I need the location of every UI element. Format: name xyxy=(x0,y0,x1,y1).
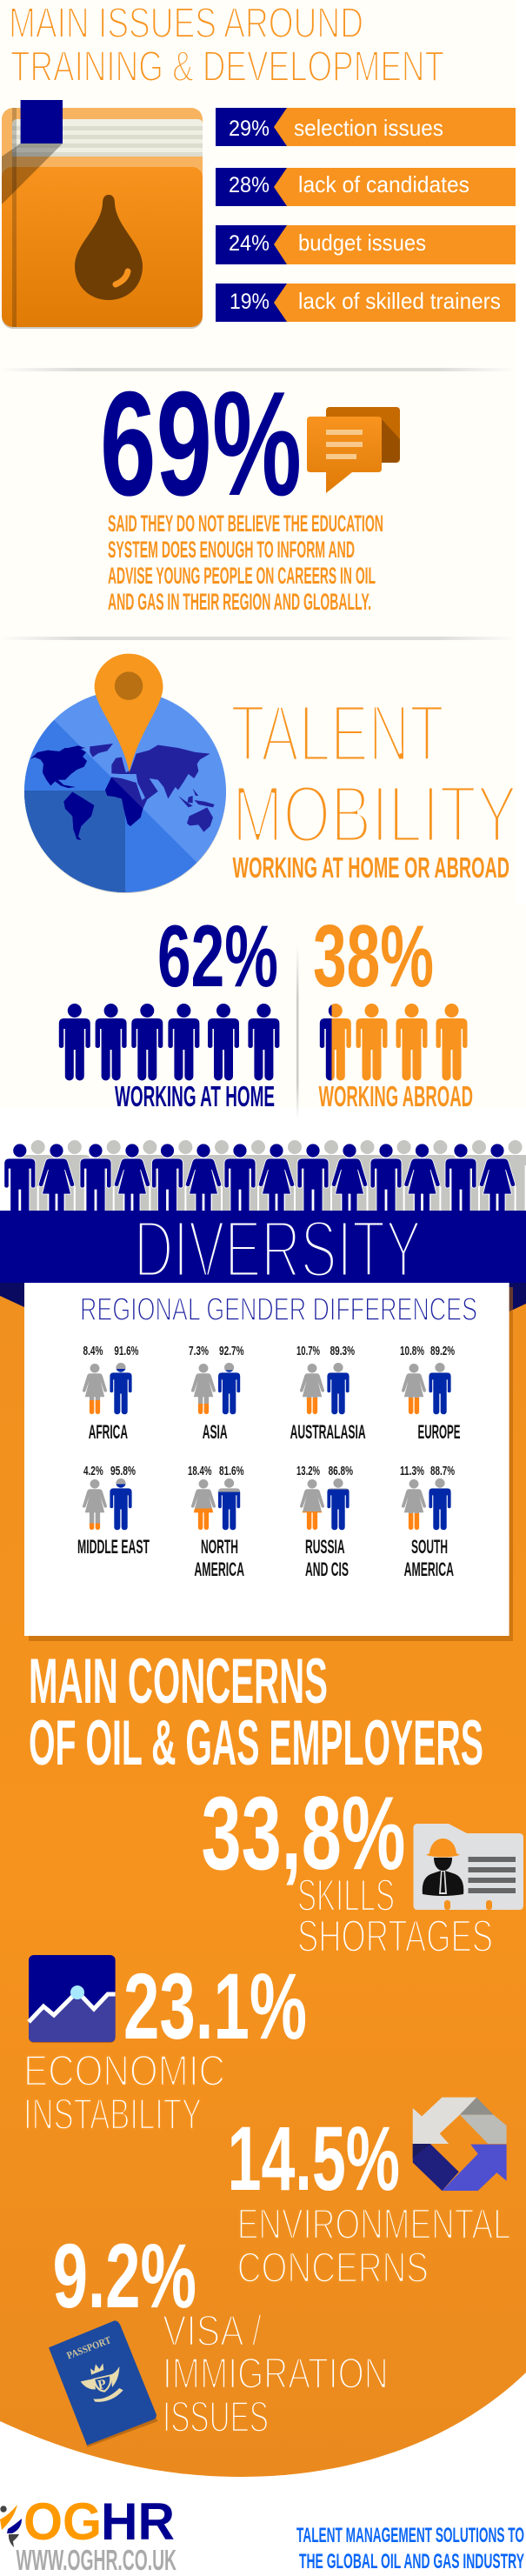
stat: 62% working at home xyxy=(59,908,279,1113)
bar: lack of skilled trainers xyxy=(216,284,516,322)
concern: environmental concerns: 14.5% xyxy=(228,2108,400,2210)
divider xyxy=(296,945,299,1119)
concern: visa and immigration issues: IMMIGRATION xyxy=(163,2349,389,2398)
region: Middle East xyxy=(77,1465,150,1558)
logo: OGHR xyxy=(0,2493,176,2576)
panel: regional gender differences xyxy=(24,1283,513,1641)
region: Russia and CIS: 13.2% xyxy=(296,1465,320,1478)
text: education statement xyxy=(108,511,383,615)
bar: budget issues xyxy=(216,225,516,264)
logo: OGHR: WWW.OGHR.CO.UK xyxy=(16,2544,176,2576)
bar: selection issues: selection issues xyxy=(294,115,443,141)
region: South America: SOUTH xyxy=(411,1536,448,1558)
concern: economic instability: INSTABILITY xyxy=(23,2090,202,2139)
footer xyxy=(0,2493,524,2576)
region: South America: AMERICA xyxy=(404,1558,454,1580)
bar: lack of candidates xyxy=(216,168,516,206)
concern: environmental concerns xyxy=(228,2098,511,2292)
concern: economic instability: 23.1% xyxy=(123,1953,307,2059)
page background xyxy=(0,0,526,1107)
bar: budget issues: budget issues xyxy=(298,230,426,256)
region: Africa xyxy=(83,1345,138,1443)
region: Australasia: AUSTRALASIA xyxy=(290,1421,366,1443)
crowd of blue figures xyxy=(4,1144,516,1221)
stat: 62% working at home: 62% xyxy=(157,908,278,1005)
region: Middle East: 95.8% xyxy=(110,1465,136,1478)
icon: recycling arrows xyxy=(413,2098,507,2191)
big number: 69%: 69% xyxy=(100,361,302,527)
region: Russia and CIS: 86.8% xyxy=(329,1465,353,1478)
heading: talent mobility xyxy=(230,688,517,859)
region: Asia: 92.7% xyxy=(219,1345,244,1358)
panel: talent mobility xyxy=(0,654,517,1119)
bar: lack of candidates: 28% xyxy=(229,173,270,197)
region: South America: 11.3% xyxy=(400,1465,424,1478)
icon: globe with map pin xyxy=(24,654,226,893)
bar: lack of skilled trainers: 19% xyxy=(230,290,270,314)
tagline xyxy=(296,2524,524,2573)
region: North America: 81.6% xyxy=(219,1465,244,1478)
logo: OGHR: HR xyxy=(101,2493,175,2551)
region: Africa: AFRICA xyxy=(89,1421,128,1443)
bar: lack of candidates: lack of candidates xyxy=(298,171,469,197)
heading: main concerns xyxy=(29,1646,483,1779)
stat: 38% working abroad xyxy=(313,908,473,1113)
logo: OGHR: OG xyxy=(23,2493,102,2551)
region: Asia: ASIA xyxy=(203,1421,228,1443)
heading: talent mobility: TALENT xyxy=(230,688,444,778)
region: Middle East: MIDDLE EAST xyxy=(77,1536,150,1558)
bar: selection issues: 29% xyxy=(229,117,270,141)
region: North America: 18.4% xyxy=(188,1465,212,1478)
region: Africa: 91.6% xyxy=(114,1345,138,1358)
region: Europe: 10.8% xyxy=(400,1345,424,1358)
panel: main concerns xyxy=(23,1646,523,2447)
panel: training issues xyxy=(2,0,516,329)
concern: visa and immigration issues: VISA / xyxy=(163,2306,262,2355)
panel: 69 percent statistic xyxy=(0,361,516,640)
heading: main issues xyxy=(9,0,444,90)
region: Middle East: 4.2% xyxy=(83,1465,103,1478)
icon: book with oil drop xyxy=(2,100,203,329)
ribbon folds xyxy=(0,1283,526,1311)
icon: speech bubbles xyxy=(307,407,400,493)
icon: line chart xyxy=(29,1955,116,2043)
icon: passport: P xyxy=(97,2377,108,2392)
region: Europe xyxy=(400,1345,461,1443)
region: Australasia: 89.3% xyxy=(330,1345,355,1358)
region: Australasia xyxy=(290,1345,366,1443)
region: North America xyxy=(188,1465,244,1580)
region: Russia and CIS xyxy=(296,1465,353,1580)
region: Australasia: 10.7% xyxy=(296,1345,320,1358)
concern: visa and immigration issues: ISSUES xyxy=(163,2392,269,2441)
icon: engineer ID folder xyxy=(414,1824,523,1910)
stat: 62% working at home: WORKING AT HOME xyxy=(115,1081,275,1113)
region: North America: NORTH xyxy=(201,1536,238,1558)
stat: 38% working abroad: 38% xyxy=(313,908,434,1005)
bar: selection issues xyxy=(216,108,516,146)
icon: passport: PASSPORT xyxy=(65,2334,113,2361)
heading: main issues: MAIN ISSUES AROUND xyxy=(9,0,363,47)
region: North America: AMERICA xyxy=(194,1558,244,1580)
concern: visa and immigration issues xyxy=(49,2226,389,2447)
region: Russia and CIS: AND CIS xyxy=(305,1558,349,1580)
bar: budget issues: 24% xyxy=(229,231,270,256)
region: Russia and CIS: RUSSIA xyxy=(305,1536,345,1558)
crowd of grey figures xyxy=(23,1140,526,1218)
bar: lack of skilled trainers: lack of skilled trainers xyxy=(298,288,501,314)
concern: skills shortages: 33,8% xyxy=(202,1775,405,1892)
panel: diversity xyxy=(0,1140,526,1311)
concern: economic instability xyxy=(23,1953,307,2139)
region: Asia: 7.3% xyxy=(189,1345,209,1358)
region: South America: 88.7% xyxy=(430,1465,455,1478)
concern: economic instability: ECONOMIC xyxy=(23,2046,225,2095)
concern: visa and immigration issues: 9.2% xyxy=(53,2226,196,2327)
region: Europe: 89.2% xyxy=(430,1345,455,1358)
region: South America xyxy=(400,1465,455,1580)
panel: orange background xyxy=(0,1283,526,2477)
concern: skills shortages xyxy=(202,1775,523,1962)
region: Europe: EUROPE xyxy=(417,1421,461,1443)
concern: skills shortages: SKILLS xyxy=(297,1871,395,1921)
concern: environmental concerns: CONCERNS xyxy=(237,2245,429,2292)
region: Asia xyxy=(189,1345,244,1443)
icon: passport xyxy=(49,2320,158,2447)
region: Africa: 8.4% xyxy=(83,1345,103,1358)
